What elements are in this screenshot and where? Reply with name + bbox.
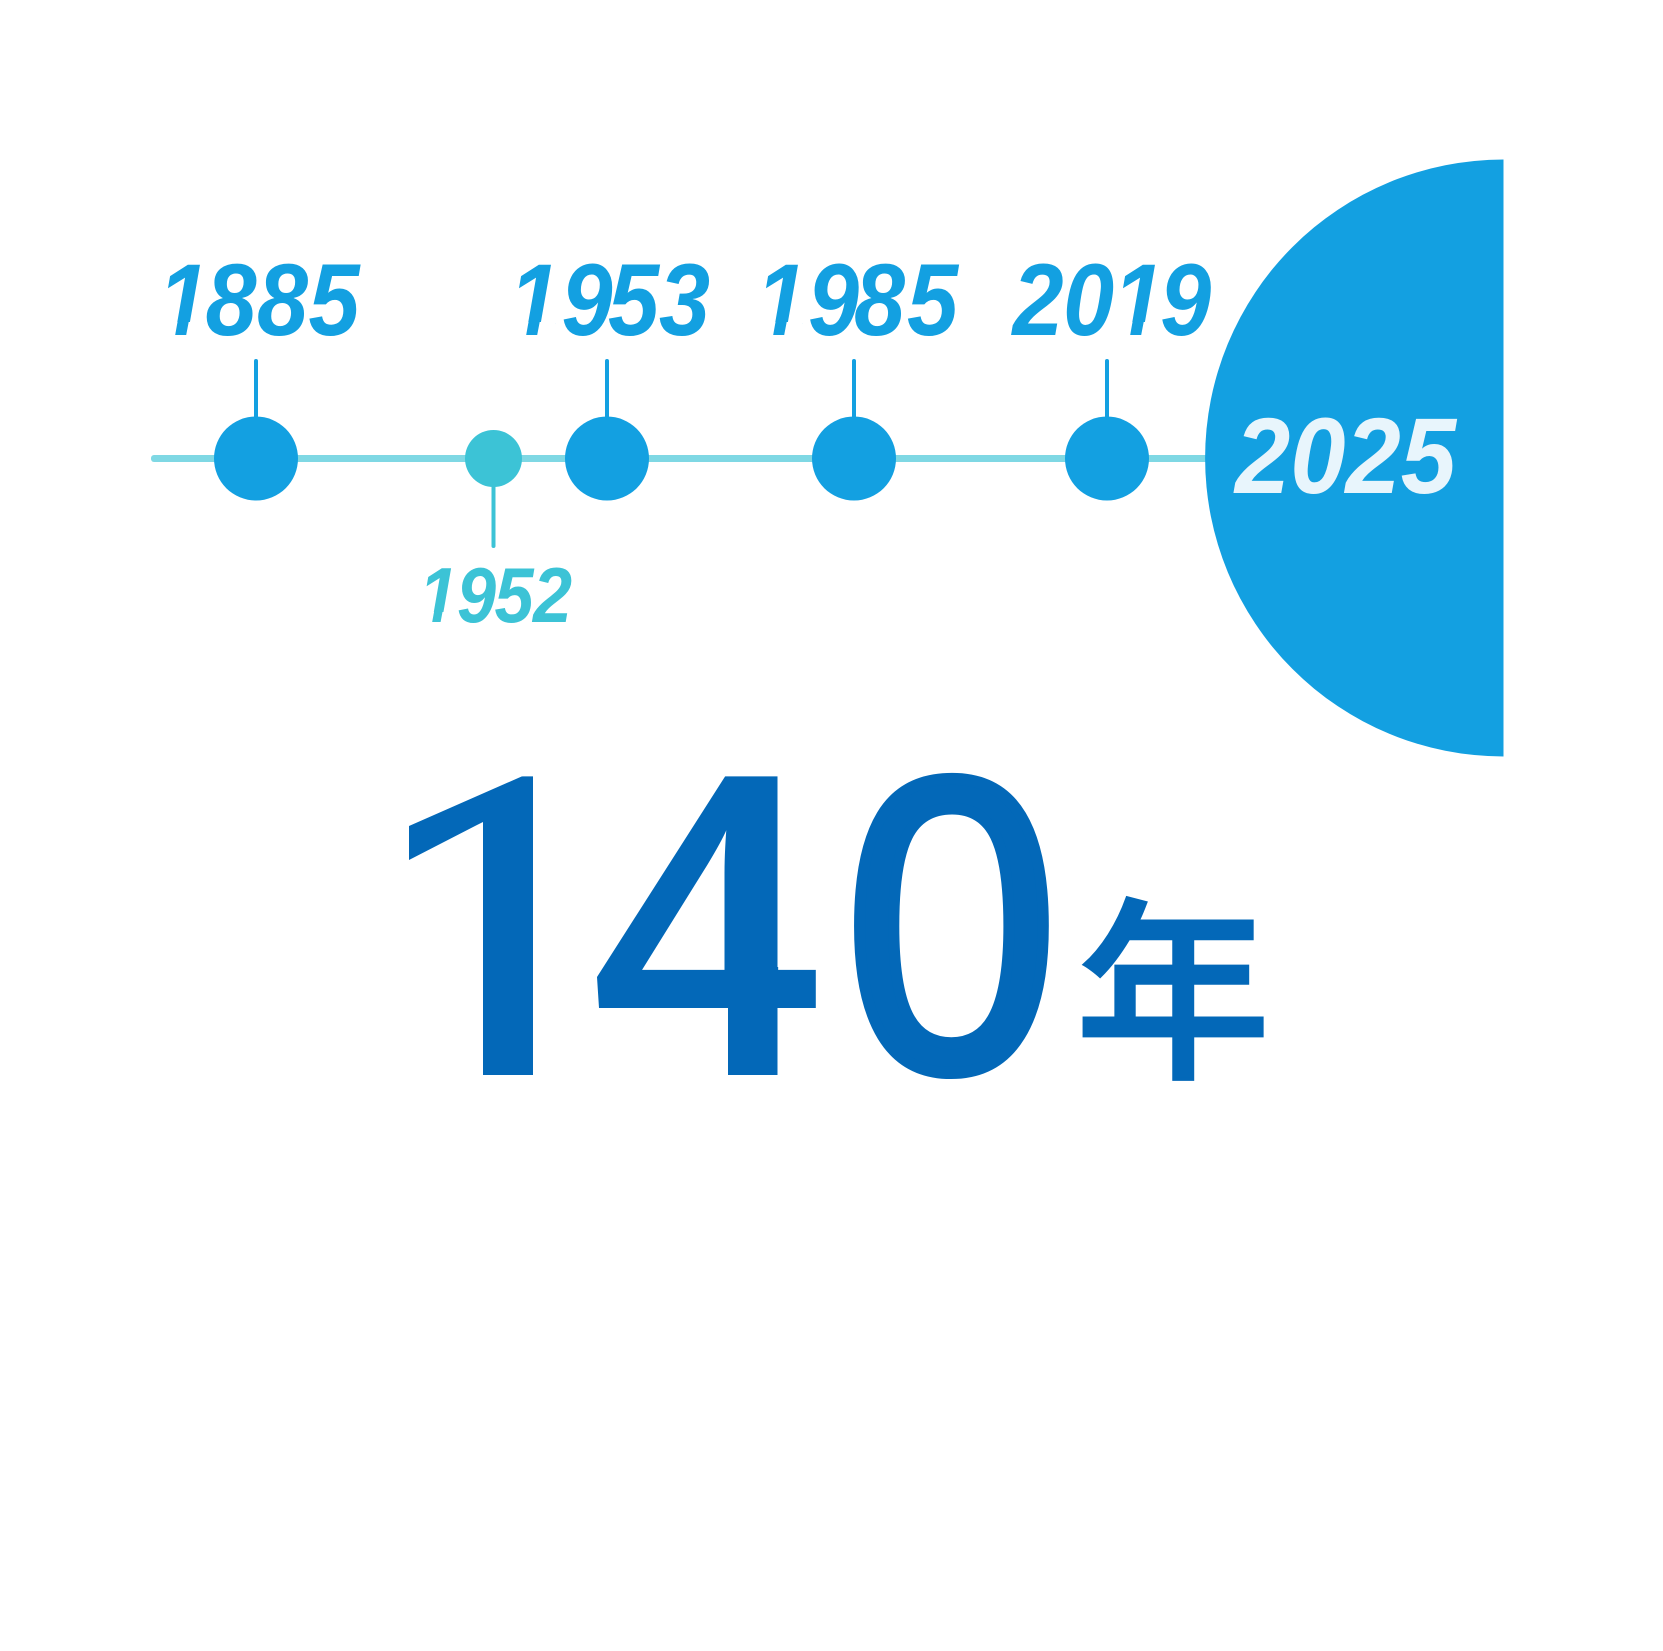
number: 140: 1 [380,682,610,1167]
timeline infographic [151,160,1504,1081]
milestone: 1985: 1985 [756,242,960,357]
milestone: 1953 [519,264,710,500]
end half circle: 2025 [1205,160,1504,756]
number: 140 [409,772,1144,1079]
milestone: 2019: 2019 [1011,242,1211,357]
milestone: 1885 [168,264,361,500]
number: 140: 0 [845,694,1058,1158]
timeline axis line [151,455,1251,462]
headline: 140 years [409,772,1264,1081]
milestone: 1952: 1952 [419,552,572,639]
milestone: 1885: 1885 [158,242,361,357]
milestone: 1985 [766,264,960,500]
milestone: 1953: 1953 [509,242,710,357]
unit: 年: 年 [1076,887,1270,1105]
milestone: 1952 [426,430,572,623]
milestone: 2019 [1011,242,1211,500]
year label: 2025: 2025 [1233,395,1458,516]
number: 140: 4 [590,682,821,1167]
